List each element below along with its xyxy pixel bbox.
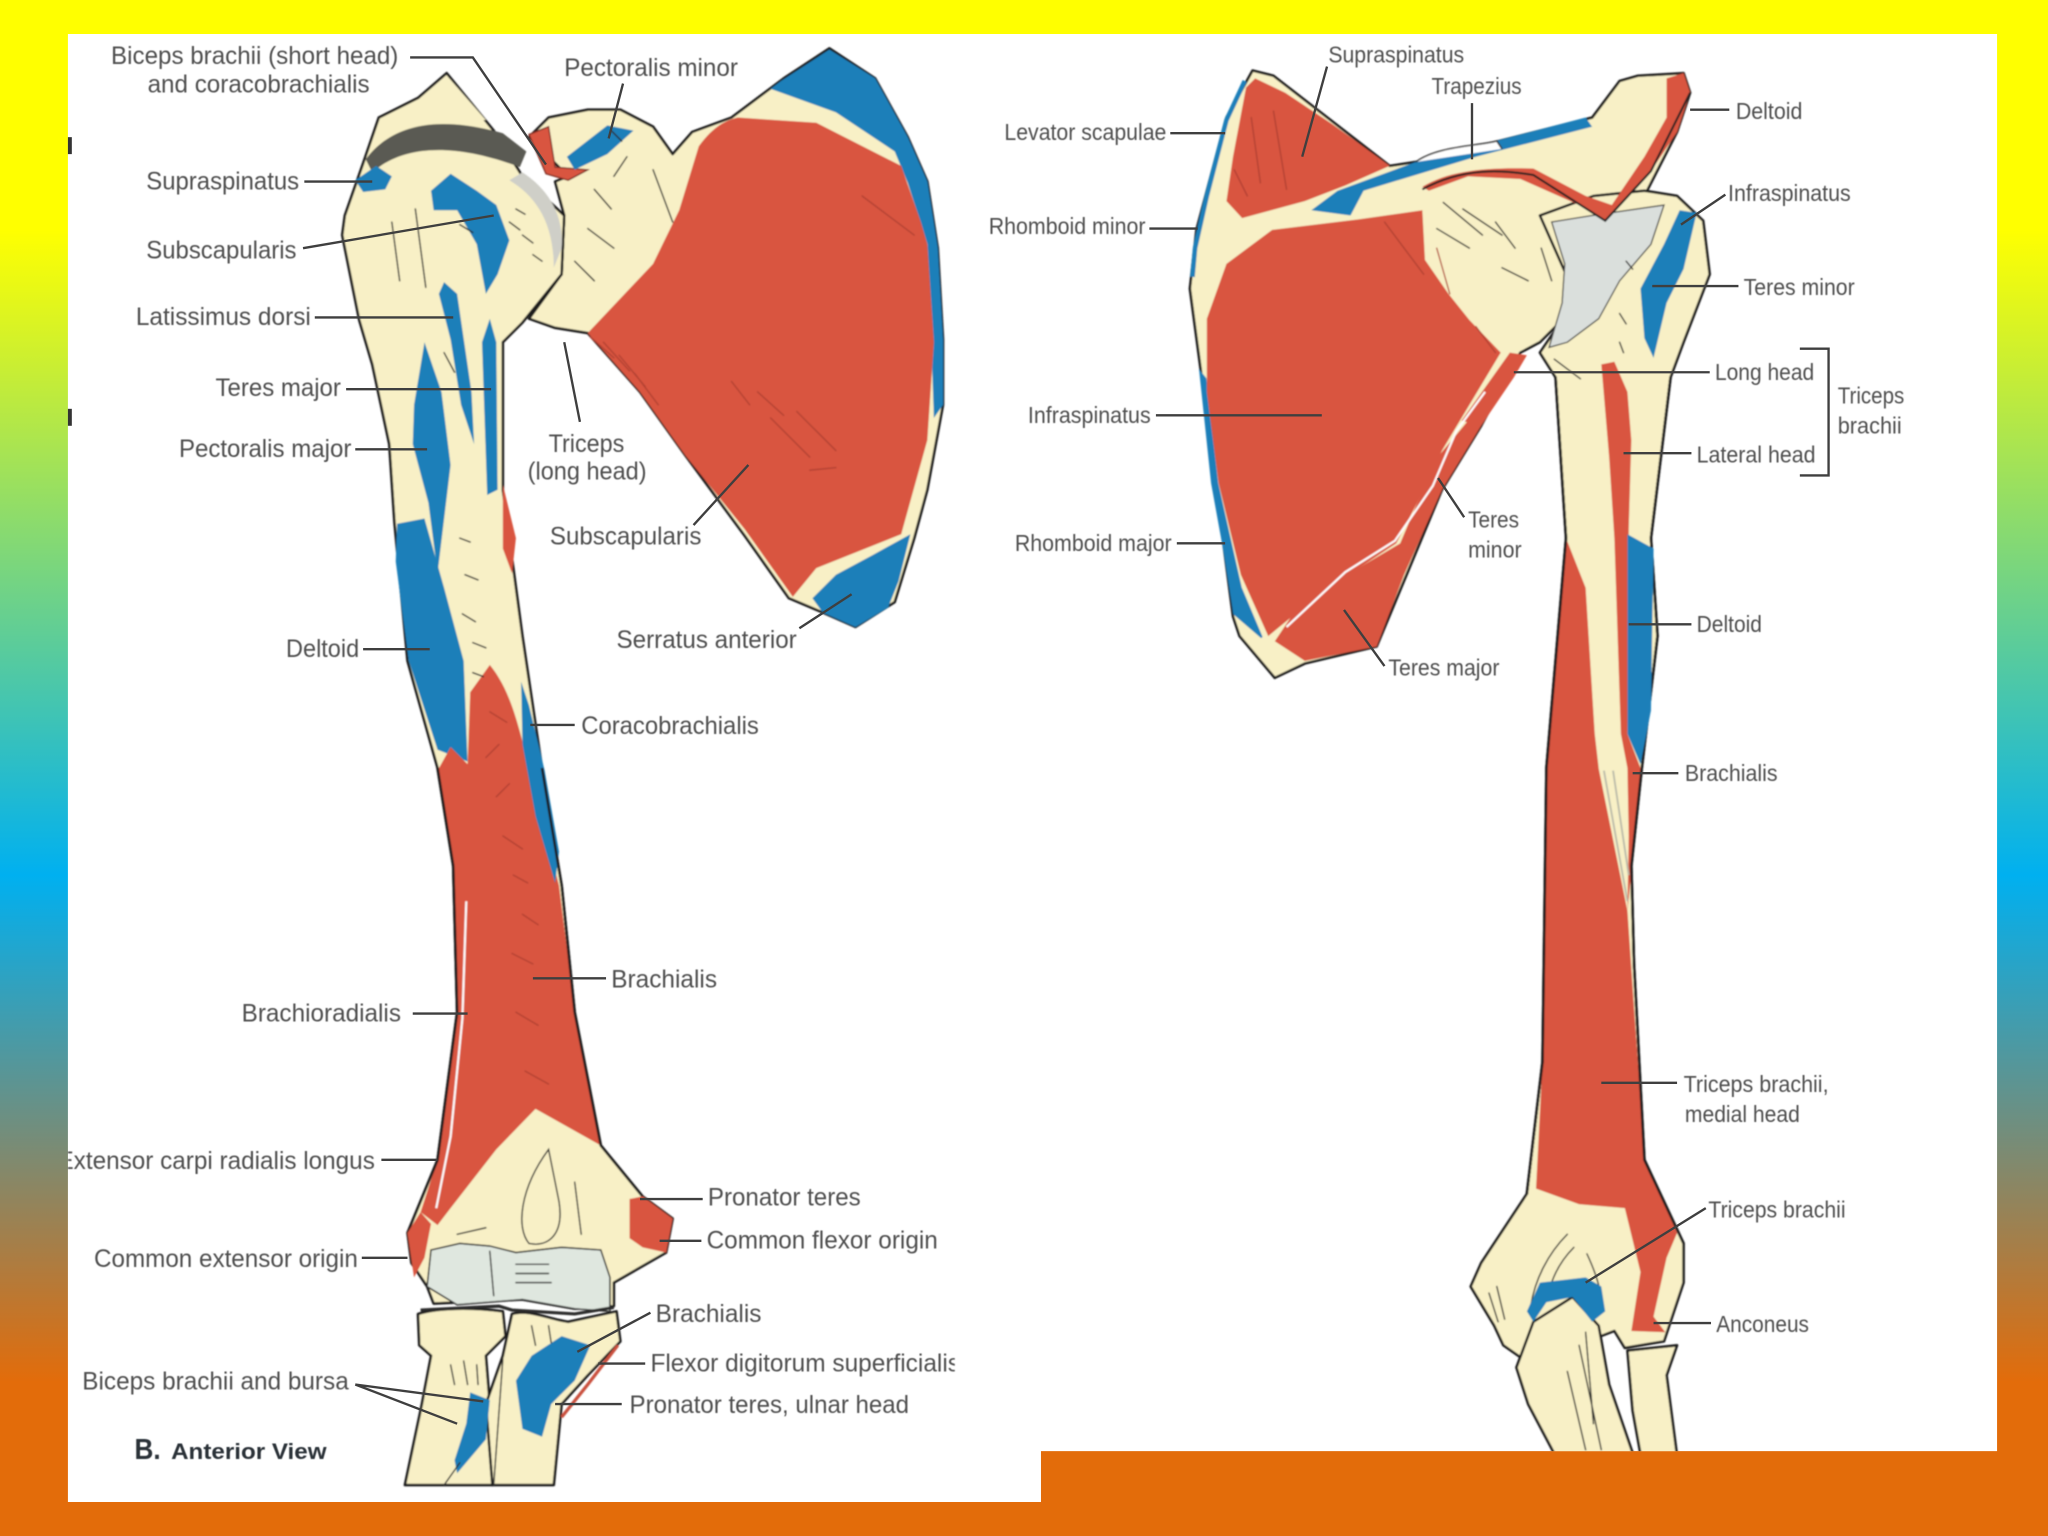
scapula blue border <box>771 50 943 418</box>
label: biceps brachii and bursa: Biceps brachii and bursa <box>82 1369 349 1396</box>
label: infraspinatus upper: Infraspinatus <box>1728 180 1851 206</box>
white sliver along radial border <box>436 901 466 1208</box>
medial head <box>1536 538 1677 1332</box>
deltoid insertion <box>1627 534 1654 764</box>
coracobrachialis <box>521 682 559 883</box>
labels: posterior view <box>989 42 1904 1337</box>
distal articular surface <box>427 1243 610 1311</box>
lateral head <box>1601 362 1640 910</box>
label: extensor carpi radialis longus: Extensor carpi radialis longus <box>57 1148 375 1175</box>
label: levator scapulae: Levator scapulae <box>1004 119 1166 145</box>
forearm hatching <box>444 1326 551 1485</box>
neck stipple <box>1437 202 1633 379</box>
supraspinatus <box>1226 78 1390 218</box>
ulna blue brachialis <box>516 1336 590 1437</box>
caption: anterior view <box>135 1434 327 1466</box>
label: pronator teres ulnar head: Pronator teres, ulnar head <box>630 1392 909 1419</box>
ulna shading <box>1567 1332 1601 1450</box>
medial blue border upper <box>1192 81 1245 277</box>
shaft fibre lines <box>1604 771 1629 901</box>
shaft outline <box>408 768 643 1233</box>
label: brachialis: Brachialis <box>1685 760 1778 786</box>
bone stippling <box>392 131 673 677</box>
ulna <box>486 1311 620 1485</box>
label: deltoid: Deltoid <box>1736 98 1802 124</box>
label: minor: minor <box>1468 537 1522 563</box>
teres major <box>482 319 498 495</box>
trapezius small flap <box>1416 141 1502 162</box>
label: rhomboid minor: Rhomboid minor <box>989 213 1146 239</box>
triceps bracket <box>1800 349 1829 475</box>
label: lateral head: Lateral head <box>1697 441 1816 467</box>
subscapularis insertion <box>431 174 509 294</box>
scapula hatching <box>590 196 914 470</box>
label: rhomboid major: Rhomboid major <box>1015 530 1172 556</box>
articular cartilage <box>1549 205 1664 347</box>
teres major and minor <box>1275 421 1481 661</box>
humerus posterior <box>1471 191 1710 1364</box>
humerus posterior edge <box>1527 377 1684 1243</box>
olecranon stipple <box>1489 1234 1603 1322</box>
figure: posterior view of scapula and humerus <box>1190 71 1710 1476</box>
label: teres minor upper: Teres minor <box>1744 274 1855 300</box>
label: anconeus: Anconeus <box>1716 1311 1809 1337</box>
label: triceps brachii medial: Triceps brachii, <box>1684 1071 1829 1097</box>
label: triceps: Triceps <box>549 431 624 458</box>
infraspinatus <box>1207 210 1501 636</box>
label: teres major: Teres major <box>216 375 341 402</box>
trapezius <box>1311 118 1592 216</box>
label: subscapularis: Subscapularis <box>146 238 296 265</box>
caption: anterior view: Anterior View <box>171 1439 327 1464</box>
radius posterior <box>1627 1345 1680 1476</box>
leader lines: posterior view <box>1149 67 1829 1323</box>
joint stippling <box>457 1149 581 1296</box>
supraspinatus <box>355 166 392 192</box>
subscapularis fossa <box>588 118 934 597</box>
label: pronator teres: Pronator teres <box>708 1185 861 1212</box>
label: long head: Long head <box>1715 359 1814 385</box>
radius blue biceps <box>455 1392 490 1473</box>
triceps insertion blue <box>1527 1277 1605 1322</box>
label: common flexor origin: Common flexor origin <box>707 1228 938 1255</box>
label: common extensor origin: Common extensor origin <box>94 1246 358 1273</box>
label: supraspinatus: Supraspinatus <box>1328 42 1464 68</box>
label: serratus anterior: Serratus anterior <box>616 627 797 654</box>
label: supraspinatus: Supraspinatus <box>146 168 299 195</box>
label: triceps: Triceps <box>1838 383 1904 409</box>
cream shaft strip with fibres <box>1599 768 1630 910</box>
label: subscapularis fossa: Subscapularis <box>550 524 701 551</box>
label: long head: (long head) <box>528 458 647 485</box>
fibre lines <box>1234 111 1496 353</box>
humeral head hatching <box>366 124 526 172</box>
label: pectoralis major: Pectoralis major <box>179 436 351 463</box>
label: triceps brachii: Triceps brachii <box>1708 1196 1846 1222</box>
serratus anterior <box>812 534 910 627</box>
medial blue border lower <box>1200 372 1262 637</box>
label: medial head: medial head <box>1685 1101 1800 1127</box>
long head triceps <box>1462 353 1527 426</box>
label: deltoid: Deltoid <box>286 636 359 663</box>
label: teres: Teres <box>1468 507 1519 533</box>
label: brachioradialis: Brachioradialis <box>242 1000 401 1027</box>
label: infraspinatus: Infraspinatus <box>1028 402 1151 428</box>
label: brachialis ulnar: Brachialis <box>656 1301 761 1328</box>
flexor origin <box>630 1196 673 1253</box>
label: latissimus dorsi: Latissimus dorsi <box>136 304 311 331</box>
white slivers <box>1287 392 1485 627</box>
label: pectoralis minor: Pectoralis minor <box>564 55 738 82</box>
coracoid red origin <box>529 127 588 180</box>
label: brachialis: Brachialis <box>611 966 717 993</box>
coracoid pale <box>450 78 487 122</box>
scapula outline <box>529 48 943 627</box>
pectoralis minor <box>567 125 633 170</box>
stray edge marks <box>68 137 72 426</box>
red shaft hatching <box>486 712 549 1084</box>
deltoid <box>396 519 468 761</box>
leader lines: anterior view <box>303 57 852 1424</box>
latissimus dorsi <box>439 282 474 444</box>
joint gap <box>421 1306 614 1314</box>
label: teres major: Teres major <box>1388 654 1500 680</box>
scapula posterior outline <box>1190 71 1690 678</box>
humerus <box>342 73 673 1309</box>
label: biceps brachii short head: Biceps brachii (short head) <box>111 43 398 70</box>
flexor digitorum red <box>562 1345 618 1417</box>
label: flexor digitorum superficialis: Flexor digitorum superficialis <box>650 1350 960 1377</box>
label: deltoid insertion: Deltoid <box>1697 611 1762 637</box>
label: coracobrachialis: Coracobrachialis <box>581 713 759 740</box>
ulna posterior <box>1516 1297 1640 1476</box>
brachialis <box>421 665 601 1225</box>
radius <box>405 1309 505 1485</box>
glenoid cartilage <box>509 172 562 268</box>
pectoralis major <box>413 342 451 573</box>
small red strip <box>503 485 516 573</box>
label: and coracobrachialis: and coracobrachialis <box>148 72 370 99</box>
caption: anterior view: B. <box>135 1434 161 1466</box>
label: trapezius: Trapezius <box>1432 73 1522 99</box>
extensor origin <box>408 1212 431 1277</box>
spine of scapula red <box>1422 73 1690 221</box>
figure: anterior view of scapula and humerus <box>342 48 943 1485</box>
spine outline <box>1422 93 1690 221</box>
infraspinatus and teres minor insertion <box>1640 210 1697 358</box>
labels: anterior view <box>57 43 960 1466</box>
label: brachii: brachii <box>1838 413 1902 439</box>
